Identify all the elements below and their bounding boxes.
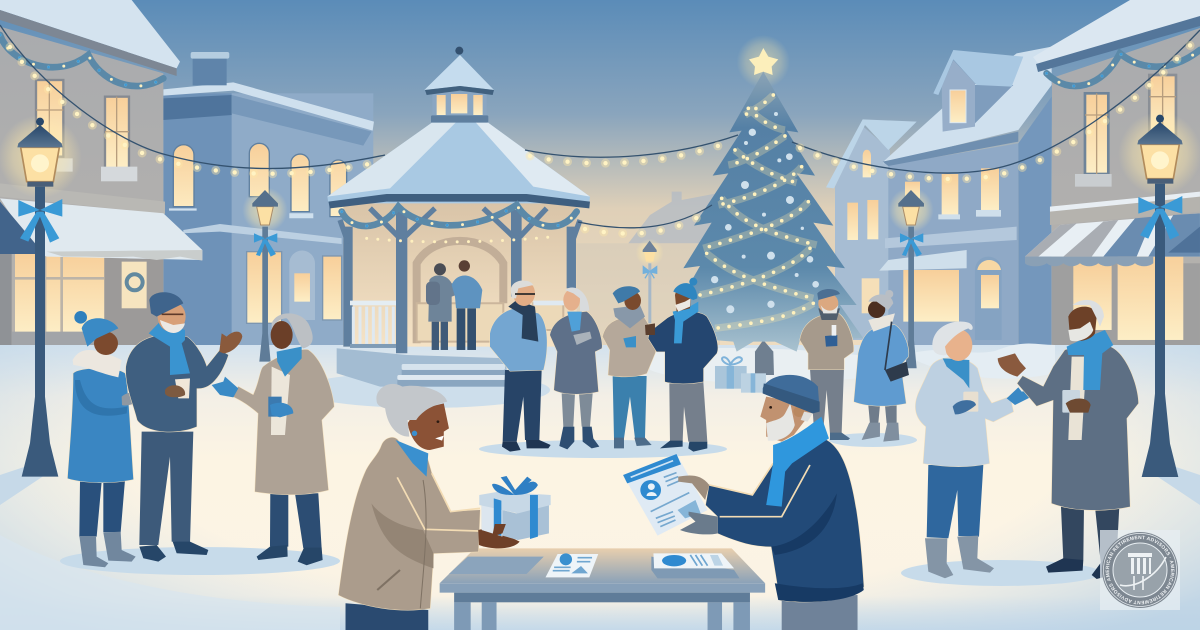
person: woman in pale jacket right bbox=[916, 322, 1033, 578]
building: right grey corner shop bbox=[1025, 0, 1200, 350]
building: left blue town hall bbox=[163, 52, 374, 350]
building: right blue house bbox=[879, 47, 1052, 350]
tree light strings bbox=[700, 95, 817, 328]
person: woman in beige coat bbox=[212, 313, 334, 565]
foreground woman head bbox=[376, 384, 449, 450]
gazebo garland bbox=[342, 205, 577, 242]
street lamp: far centre bbox=[636, 239, 664, 323]
person: man in long grey coat right bbox=[998, 300, 1138, 579]
building: right pale house bbox=[826, 119, 917, 340]
street lamp: far left large bbox=[0, 115, 82, 477]
building: left grey corner shop bbox=[0, 0, 202, 350]
gazebo posts bbox=[343, 210, 576, 353]
gift boxes by tree bbox=[715, 357, 766, 393]
ground shadows bbox=[60, 433, 1101, 586]
person: man in light blue jacket bbox=[490, 280, 551, 452]
street lamp: mid left bbox=[242, 187, 288, 362]
street lamp: mid right bbox=[888, 187, 934, 368]
distant house behind square bbox=[520, 192, 720, 353]
foreground man scarf bbox=[766, 417, 829, 507]
gazebo bbox=[327, 47, 590, 387]
person: man in navy jacket bbox=[645, 278, 718, 452]
gift box bbox=[479, 476, 551, 540]
group: central conversation bbox=[490, 278, 909, 452]
person: woman in blue coat with bag bbox=[854, 290, 909, 442]
table brochure stack bbox=[651, 553, 740, 578]
christmas tree bbox=[672, 35, 863, 375]
light strings bbox=[0, 25, 1200, 234]
person: woman in beige parka bbox=[603, 286, 655, 448]
group: left trio with mugs bbox=[68, 292, 334, 567]
table leaflet bbox=[546, 553, 598, 577]
gazebo base and steps bbox=[337, 348, 507, 387]
gazebo rear railing bbox=[417, 303, 563, 342]
gazebo main roof bbox=[327, 122, 590, 208]
foreground man head bbox=[760, 375, 820, 442]
person: foreground man with document bbox=[623, 375, 864, 630]
tree star bbox=[749, 48, 778, 75]
person: man with cap and blue scarf bbox=[126, 292, 242, 562]
couple under gazebo bbox=[426, 260, 482, 350]
snow drifts bbox=[0, 344, 1200, 630]
gazebo cupola bbox=[424, 47, 494, 123]
person: man in beige coat by tree bbox=[800, 289, 854, 440]
sky background bbox=[0, 0, 1200, 380]
table bbox=[440, 548, 765, 630]
ground snow bbox=[0, 345, 1200, 630]
person: foreground woman handing gift bbox=[339, 384, 520, 630]
tree ornaments bbox=[711, 112, 819, 313]
table tablet bbox=[449, 557, 544, 574]
logo seal: AMERICAN RETIREMENT ADVISORS · AMERICAN RETIREMENT ADVISORS bbox=[1106, 536, 1174, 604]
person: woman in dark coat bbox=[550, 288, 602, 449]
building garlands bbox=[0, 35, 1200, 86]
foreground man document bbox=[623, 454, 708, 536]
street lamp: far right large bbox=[1118, 112, 1200, 477]
person: woman in blue coat bbox=[68, 311, 145, 567]
gazebo left railing bbox=[350, 301, 565, 348]
